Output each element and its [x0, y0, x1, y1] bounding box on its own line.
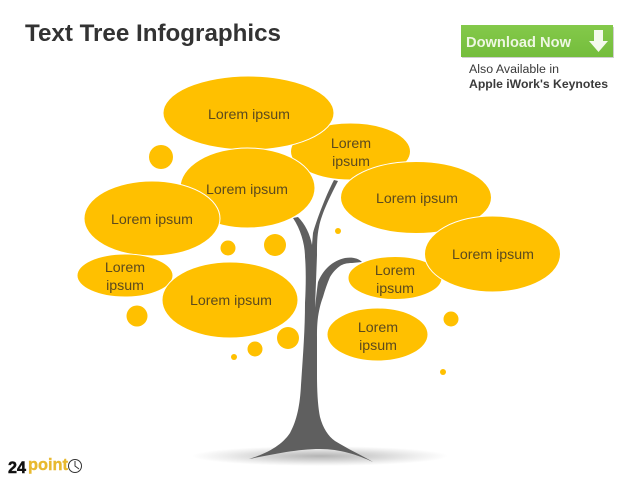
leaf: top — [163, 76, 334, 150]
leaf: upper right small: Lorem — [331, 136, 371, 152]
leaf: far right — [424, 216, 560, 292]
leaf: bottom right: Lorem — [358, 320, 398, 336]
leaf: right inner small: ipsum — [376, 281, 414, 297]
availability note — [469, 64, 608, 91]
leaf: right inner small — [348, 256, 442, 300]
leaf: bottom right — [327, 308, 428, 361]
title: Text Tree Infographics — [25, 20, 281, 47]
leaf: far left small: ipsum — [106, 278, 144, 294]
availability note: Apple iWork's Keynotes — [469, 79, 608, 91]
leaf: right upper: Lorem ipsum — [376, 191, 458, 207]
leaf: bottom right: ipsum — [359, 338, 397, 354]
brand logo — [8, 455, 82, 477]
tree trunk and branches — [249, 180, 373, 462]
leaf: lower left: Lorem ipsum — [190, 293, 272, 309]
brand logo: 24 — [8, 458, 27, 477]
brand logo: point — [28, 455, 68, 474]
leaf: left — [84, 181, 220, 256]
download button — [461, 25, 614, 58]
leaf: lower left — [162, 262, 298, 338]
ground shadow — [192, 446, 448, 466]
leaf: centre — [180, 148, 315, 228]
leaf: far right: Lorem ipsum — [452, 247, 534, 263]
leaf: upper right small: ipsum — [332, 154, 370, 170]
leaf: upper right small — [290, 123, 410, 180]
leaf: top: Lorem ipsum — [208, 107, 290, 123]
download button: Download Now — [466, 35, 572, 51]
leaf: far left small — [77, 254, 173, 297]
leaf: left: Lorem ipsum — [111, 212, 193, 228]
leaf: far left small: Lorem — [105, 260, 145, 276]
decorative leaf dots — [126, 145, 458, 375]
leaf: right upper — [340, 162, 492, 234]
leaf: right inner small: Lorem — [375, 263, 415, 279]
leaf: centre: Lorem ipsum — [206, 182, 288, 198]
availability note: Also Available in — [469, 64, 559, 76]
